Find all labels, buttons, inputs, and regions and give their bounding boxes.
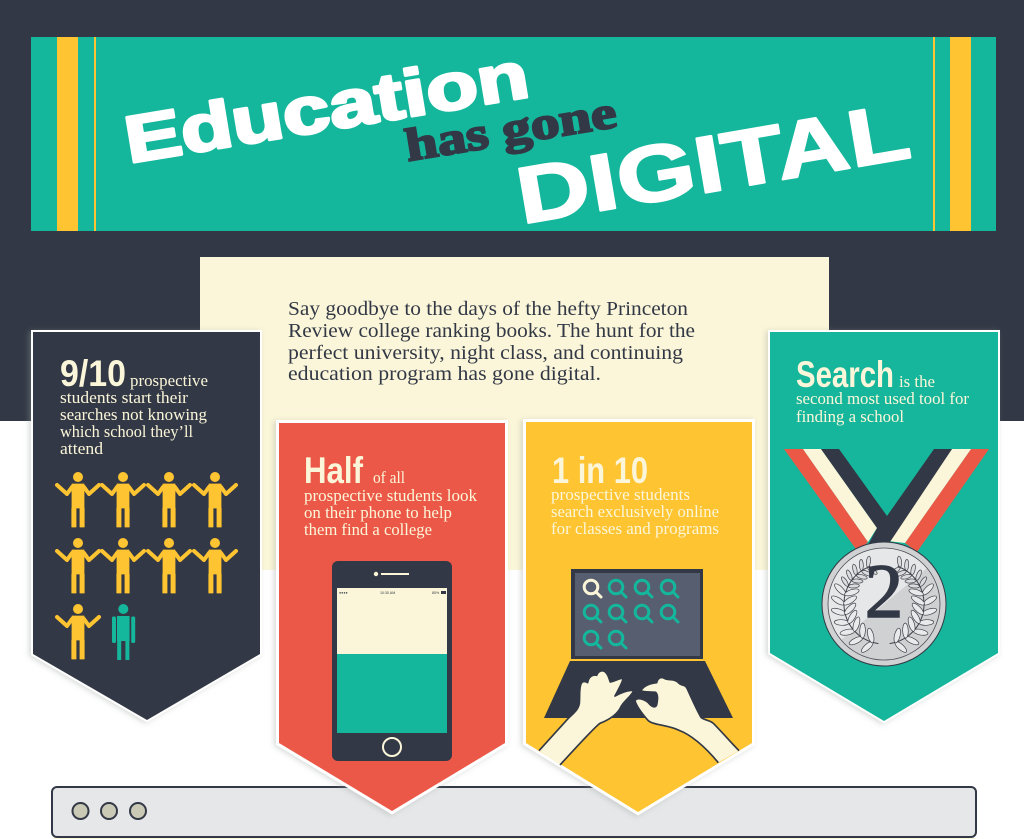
intro text: Say goodbye to the days of the hefty Princeton <box>288 298 688 320</box>
panel: half of students <box>279 423 505 811</box>
text: half description: on their phone to help <box>304 503 452 522</box>
icon: smartphone: 85% <box>432 591 440 595</box>
title: has gone: has gone <box>401 86 620 171</box>
panel: 9/10 students <box>33 332 260 720</box>
dark header background <box>0 0 1024 421</box>
intro text <box>288 298 695 385</box>
text: 9/10 description: attend <box>60 439 104 458</box>
text: search description: finding a school <box>796 407 904 426</box>
icon: people pictogram <box>57 472 236 660</box>
text: 1 in 10 description <box>551 485 719 538</box>
text: search description <box>796 372 970 426</box>
icon: smartphone: 10:30 AM <box>380 591 395 595</box>
text: half description <box>304 468 478 539</box>
icon: smartphone <box>332 561 452 761</box>
text: 9/10 description <box>60 371 208 458</box>
text: 9/10 description: searches not knowing <box>60 405 207 424</box>
text: 9/10 description: students start their <box>60 388 189 407</box>
icon: laptop with hands <box>539 569 739 765</box>
text: 1 in 10 description: search exclusively online <box>551 502 719 521</box>
intro text: education program has gone digital. <box>288 363 601 385</box>
icon: left hand <box>539 671 634 765</box>
intro panel <box>200 257 829 570</box>
intro text: Review college ranking books. The hunt for the <box>288 320 695 342</box>
text: 1 in 10 description: prospective students <box>551 485 690 504</box>
text: half description: prospective students look <box>304 486 478 505</box>
title: DIGITAL: DIGITAL <box>510 86 916 241</box>
intro text: perfect university, night class, and continuing <box>288 342 683 364</box>
heading: 9/10: 9/10 <box>60 353 126 394</box>
icon: laurel wreath <box>829 555 939 656</box>
text: half description: them find a college <box>304 520 432 539</box>
icon: teal person <box>112 604 135 660</box>
heading: Search: Search <box>796 354 894 395</box>
title banner <box>31 37 996 241</box>
panel: 1 in 10 students <box>526 422 752 812</box>
browser window bar <box>52 787 976 839</box>
title: Education: Education <box>119 37 534 177</box>
text: 9/10 description: which school they’ll <box>60 422 193 441</box>
icon: medal <box>784 449 989 666</box>
text: half description: of all <box>373 468 405 487</box>
text: 9/10 description: prospective <box>130 371 208 390</box>
text: search description: second most used tool for <box>796 389 970 408</box>
icon: smartphone: ●●●● <box>339 591 348 595</box>
text: 1 in 10 description: for classes and programs <box>551 519 719 538</box>
medal number 2: 2 <box>865 548 903 634</box>
icon: right hand <box>635 678 739 763</box>
panel: search <box>770 332 998 721</box>
heading: Half: Half <box>304 450 364 491</box>
text: search description: is the <box>899 372 935 391</box>
heading: 1 in 10: 1 in 10 <box>552 450 648 491</box>
